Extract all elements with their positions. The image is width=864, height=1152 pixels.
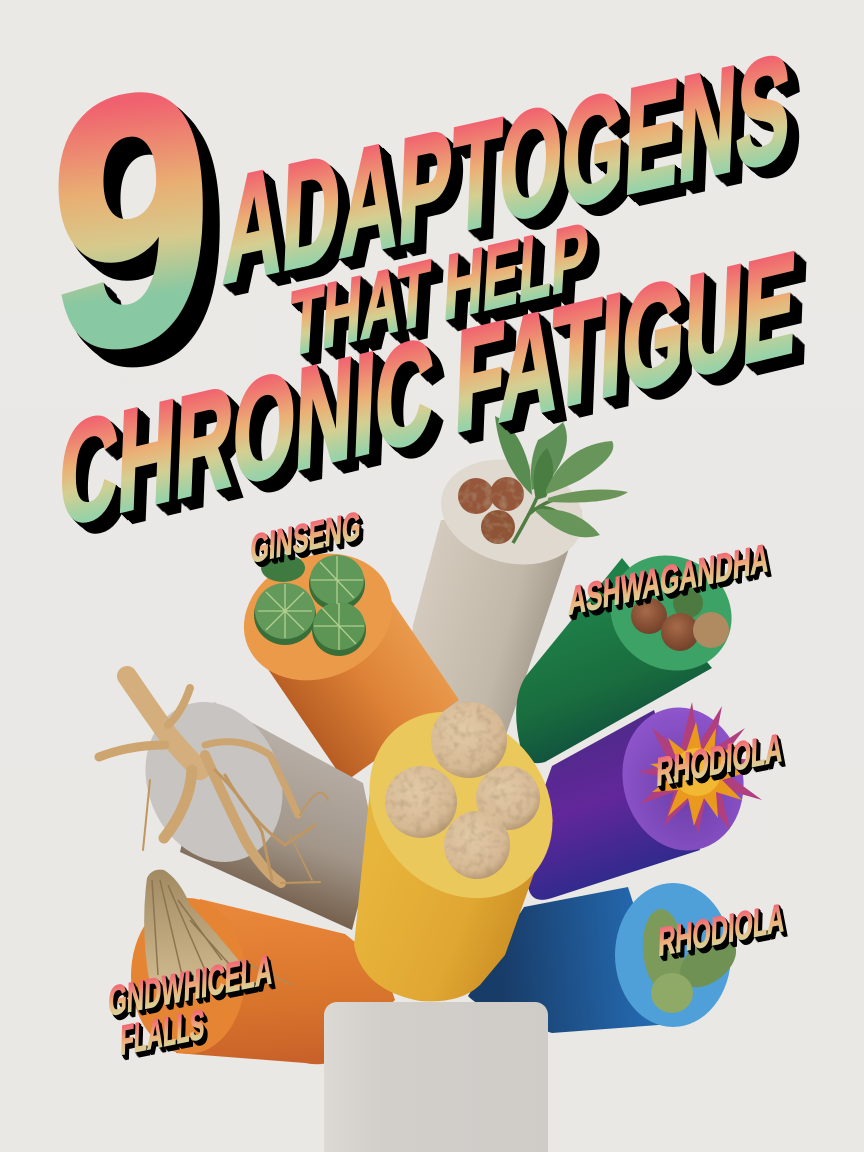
cylinder: yellow center [332,674,590,1001]
icon: four tan root balls [385,702,540,879]
icon: rhodiola spiky flower [638,702,764,834]
label: ginseng: GINSENG [250,502,361,572]
icon: dried root stalk [144,870,292,985]
pedestal [324,1002,548,1152]
cylinder: blue [468,883,731,1033]
icon: ginseng slices [254,554,366,656]
label: flalls: FLALLS [120,1001,205,1064]
label: gndwhicela: GNDWHICELA [108,946,273,1025]
cylinder: beige [400,445,594,760]
label: rhodiola purple: RHODIOLA [656,724,783,795]
cylinder: orange (upper left) [225,532,459,782]
illustration: fan of cylinders [122,445,757,1152]
cylinder: silver [122,681,375,930]
cylinder: purple [528,696,757,900]
icon: ginseng root [99,676,328,883]
cylinder: orange (lower left) [131,898,395,1064]
title numeral 9: 9 [51,13,211,427]
icon: brown herb clusters and leaves [458,416,628,544]
title line: that help: THAT HELP [287,203,591,376]
icon: green leaves on blue cylinder [640,908,746,1013]
icon: ashwagandha nuts [631,588,729,651]
title [51,13,799,557]
cylinder: green [516,534,753,763]
